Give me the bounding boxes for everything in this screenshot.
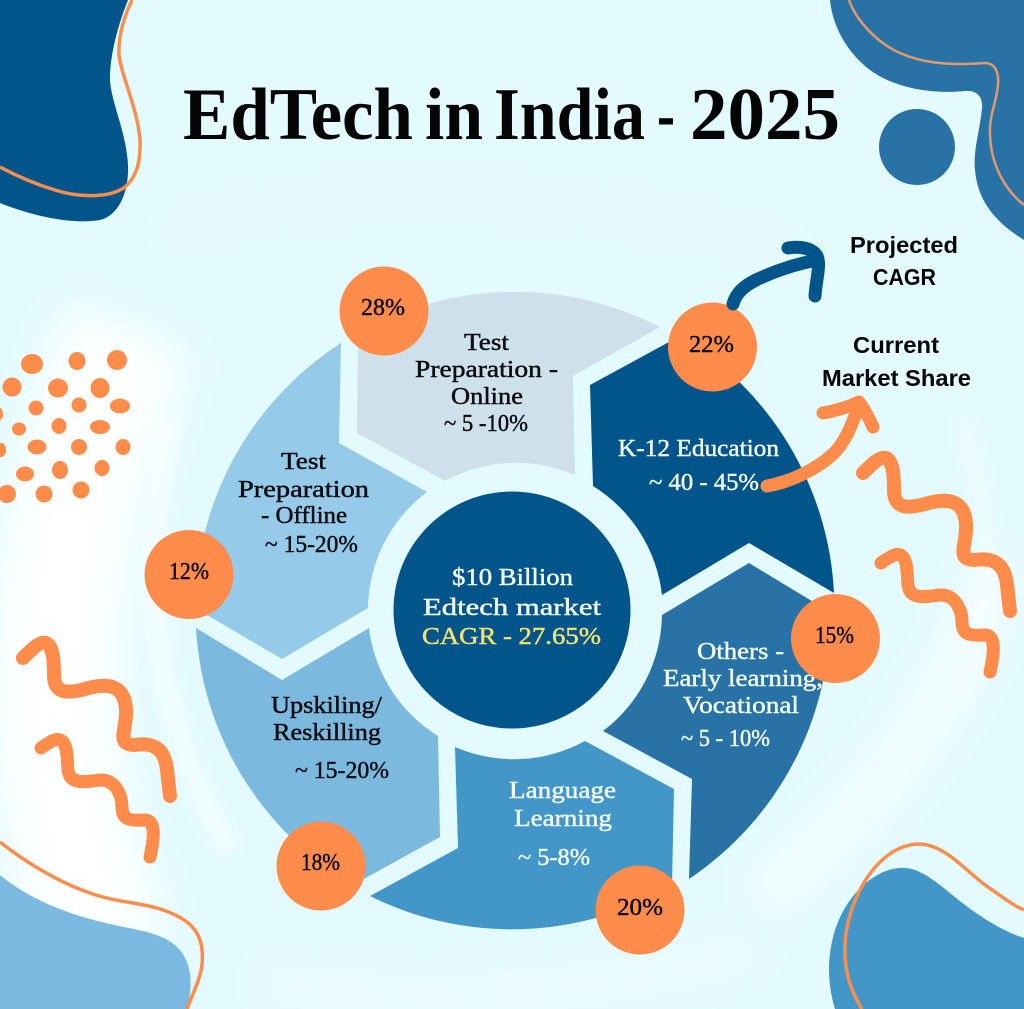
label: current market share bbox=[822, 332, 971, 391]
label: projected cagr bbox=[850, 232, 958, 290]
panel: upskilling: Reskilling bbox=[273, 719, 381, 746]
squiggles: right bbox=[863, 458, 1010, 672]
badge: 15% bbox=[791, 594, 880, 683]
blob: top right bbox=[830, 0, 1024, 240]
label: current market share: Current bbox=[853, 332, 939, 358]
panel: k-12 education: K-12 Education bbox=[618, 435, 779, 462]
panel: upskilling: Upskiling/ bbox=[271, 692, 382, 719]
label: projected cagr: Projected bbox=[850, 232, 958, 258]
center circle: market size: Edtech market bbox=[423, 594, 601, 621]
panel: others bbox=[603, 563, 830, 879]
panel: language learning: Learning bbox=[514, 805, 612, 832]
panel: others: Early learning, bbox=[663, 665, 823, 692]
badge: 22% bbox=[668, 302, 757, 392]
panel: upskilling bbox=[196, 628, 440, 885]
blob: bottom right bbox=[829, 844, 1024, 1009]
badge: 12% bbox=[144, 530, 234, 619]
badge: 20% bbox=[596, 866, 684, 954]
panel: k-12 education: ~ 40 - 45% bbox=[649, 469, 759, 496]
title bbox=[183, 74, 840, 156]
badge: 15%: 15% bbox=[815, 622, 854, 649]
panel: language learning: ~ 5-8% bbox=[518, 844, 590, 871]
panel: test preparation offline: Preparation bbox=[238, 476, 369, 503]
panel: upskilling: ~ 15-20% bbox=[295, 757, 389, 784]
badge: 28%: 28% bbox=[361, 294, 405, 321]
title: India bbox=[494, 74, 645, 156]
panel: test preparation online: Test bbox=[464, 329, 509, 356]
panel: others: Vocational bbox=[683, 692, 799, 719]
badge: 18% bbox=[276, 822, 366, 910]
title: - bbox=[657, 74, 675, 156]
panel: k-12 education bbox=[590, 336, 834, 595]
title: 2025 bbox=[690, 74, 840, 156]
panel: test preparation online bbox=[357, 292, 660, 481]
title: EdTech bbox=[183, 74, 413, 156]
center circle: market size: $10 Billion bbox=[452, 564, 573, 591]
arrow: projected cagr bbox=[733, 247, 819, 304]
panel: test preparation offline bbox=[195, 343, 427, 659]
dot pattern bbox=[0, 350, 130, 503]
panel: test preparation offline: ~ 15-20% bbox=[265, 531, 358, 558]
badge: 18%: 18% bbox=[301, 849, 340, 876]
panel: test preparation online: Online bbox=[451, 383, 523, 410]
panel: test preparation offline: - Offline bbox=[261, 502, 347, 529]
label: projected cagr: CAGR bbox=[873, 264, 936, 290]
center circle: market size bbox=[394, 492, 630, 728]
title: in bbox=[425, 74, 483, 156]
blob: top left bbox=[0, 0, 140, 221]
panel: test preparation online: Preparation - bbox=[415, 356, 558, 383]
label: current market share: Market Share bbox=[822, 365, 971, 391]
center circle: market size: CAGR - 27.65% bbox=[422, 623, 601, 650]
arrow: current market share bbox=[767, 402, 873, 486]
squiggles: left bbox=[23, 643, 170, 857]
panel: others: Others - bbox=[697, 638, 784, 665]
badge: 22%: 22% bbox=[689, 331, 734, 358]
blob: bottom left bbox=[0, 842, 202, 1009]
panel: test preparation offline: Test bbox=[281, 448, 326, 475]
panel: test preparation online: ~ 5 -10% bbox=[444, 410, 528, 437]
badge: 20%: 20% bbox=[617, 894, 663, 921]
icon: decorative circle bbox=[879, 109, 955, 185]
panel: others: ~ 5 - 10% bbox=[681, 725, 770, 752]
panel: language learning bbox=[370, 741, 674, 929]
badge: 12%: 12% bbox=[169, 558, 209, 585]
panel: language learning: Language bbox=[509, 777, 616, 804]
badge: 28% bbox=[340, 266, 428, 356]
